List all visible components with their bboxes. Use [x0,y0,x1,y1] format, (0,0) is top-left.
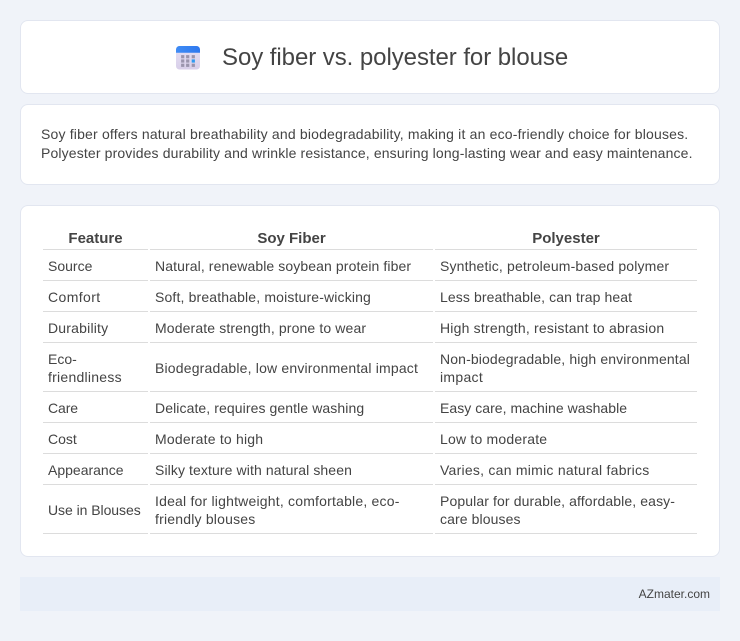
row: eco-friendliness [48,351,690,385]
row: source: Source [48,258,92,274]
row: eco-friendliness: friendliness [48,369,122,385]
row: durability: Moderate strength, prone to wear [155,320,366,336]
icon: calendar [176,46,200,70]
row: durability: Durability [48,320,108,336]
row: eco-friendliness: impact [440,369,483,385]
row: use in blouses: Ideal for lightweight, comfortable, eco- [155,493,400,509]
row: care: Care [48,400,78,416]
row: use in blouses: care blouses [440,511,521,527]
comparison table [43,230,697,534]
row: use in blouses: Use in Blouses [48,502,141,518]
title: Soy fiber vs. polyester for blouse [222,44,568,71]
row: use in blouses: friendly blouses [155,511,255,527]
intro panel [20,104,720,185]
row: eco-friendliness: Eco- [48,351,77,367]
row: cost: Moderate to high [155,431,263,447]
row: comfort: Less breathable, can trap heat [440,289,632,305]
row: cost [48,431,547,447]
column headers: Feature [68,230,123,247]
row: appearance: Appearance [48,462,124,478]
row: comfort: Soft, breathable, moisture-wicking [155,289,371,305]
header panel [20,20,720,94]
row: eco-friendliness: Non-biodegradable, high environmental [440,351,690,367]
row: use in blouses: Popular for durable, affordable, easy- [440,493,675,509]
row: appearance: Silky texture with natural sheen [155,462,352,478]
row: care: Delicate, requires gentle washing [155,400,364,416]
row: source: Synthetic, petroleum-based polymer [440,258,669,274]
row: care: Easy care, machine washable [440,400,627,416]
row: cost: Low to moderate [440,431,547,447]
row: cost: Cost [48,431,77,447]
intro text [41,126,693,161]
column headers: Soy Fiber [257,230,326,247]
row: durability [48,320,664,336]
source credit: AZmater.com [639,587,710,601]
intro text: Soy fiber offers natural breathability and biodegradability, making it an eco-friendly choice for blouses. [41,126,688,142]
row: use in blouses [48,493,675,527]
column headers: Polyester [532,230,600,247]
footer bar [20,577,720,611]
row: eco-friendliness: Biodegradable, low environmental impact [155,360,418,376]
row: care [48,400,627,416]
row: durability: High strength, resistant to abrasion [440,320,664,336]
row: comfort: Comfort [48,289,101,305]
row: appearance: Varies, can mimic natural fabrics [440,462,650,478]
row: source: Natural, renewable soybean protein fiber [155,258,411,274]
column headers [68,230,600,247]
intro text: Polyester provides durability and wrinkle resistance, ensuring long-lasting wear and easy maintenance. [41,145,693,161]
row: source [48,258,669,274]
row: comfort [48,289,632,305]
comparison table panel [20,205,720,557]
row: appearance [48,462,650,478]
